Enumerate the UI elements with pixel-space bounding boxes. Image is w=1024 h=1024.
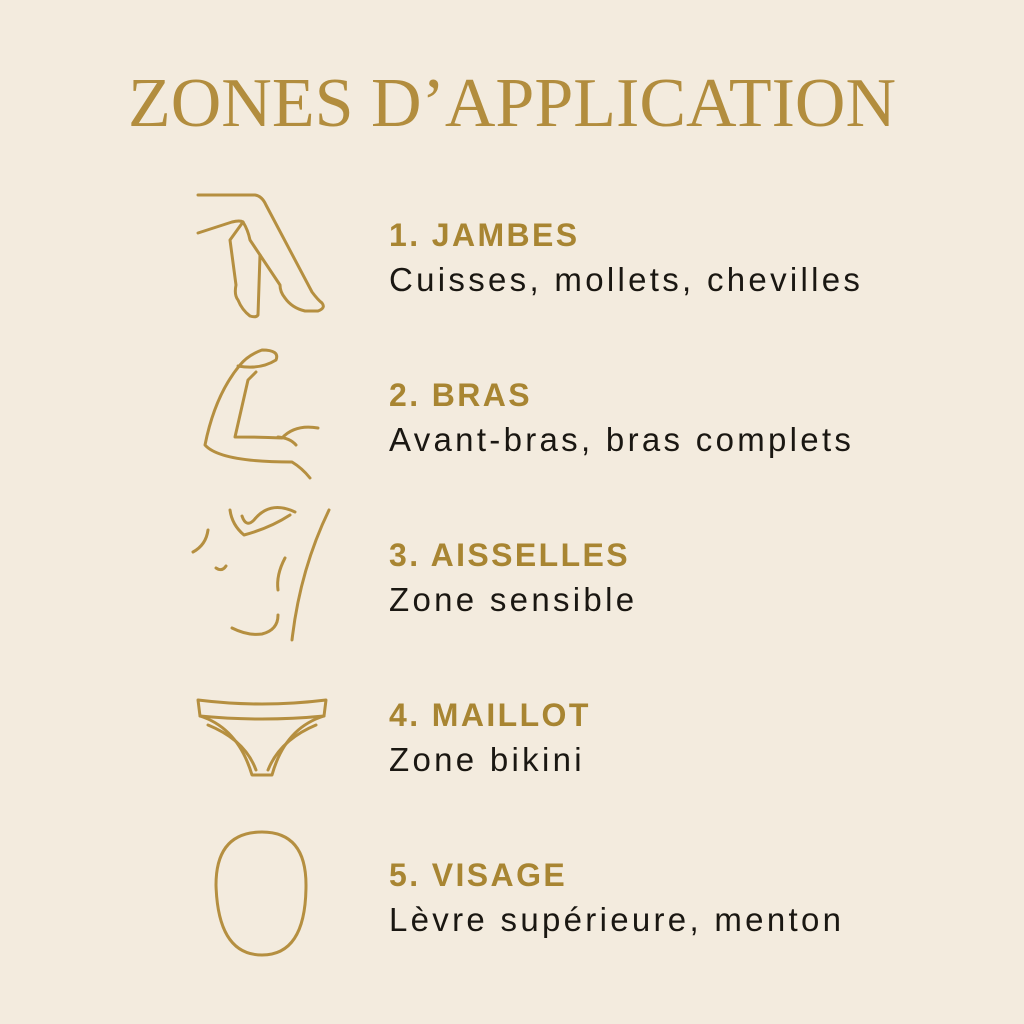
item 2: 2. BRAS bbox=[389, 377, 532, 413]
item 4: Zone bikini bbox=[389, 741, 585, 778]
icon: bikini bbox=[198, 700, 326, 775]
item 5 bbox=[389, 857, 844, 938]
icon: armpit bbox=[193, 508, 329, 640]
icon: legs bbox=[198, 195, 323, 317]
item 5: 5. VISAGE bbox=[389, 857, 567, 893]
item 3: Zone sensible bbox=[389, 581, 637, 618]
item 1: 1. JAMBES bbox=[389, 217, 580, 253]
item 1 bbox=[389, 217, 863, 298]
item 4 bbox=[389, 697, 591, 778]
item 3 bbox=[389, 537, 637, 618]
item 3: 3. AISSELLES bbox=[389, 537, 630, 573]
title: ZONES D’APPLICATION bbox=[128, 65, 896, 142]
icon: face bbox=[216, 832, 306, 955]
item 1: Cuisses, mollets, chevilles bbox=[389, 261, 863, 298]
item 2: Avant-bras, bras complets bbox=[389, 421, 854, 458]
item 2 bbox=[389, 377, 854, 458]
icon: arm bbox=[205, 350, 318, 478]
item 5: Lèvre supérieure, menton bbox=[389, 901, 844, 938]
item 4: 4. MAILLOT bbox=[389, 697, 591, 733]
